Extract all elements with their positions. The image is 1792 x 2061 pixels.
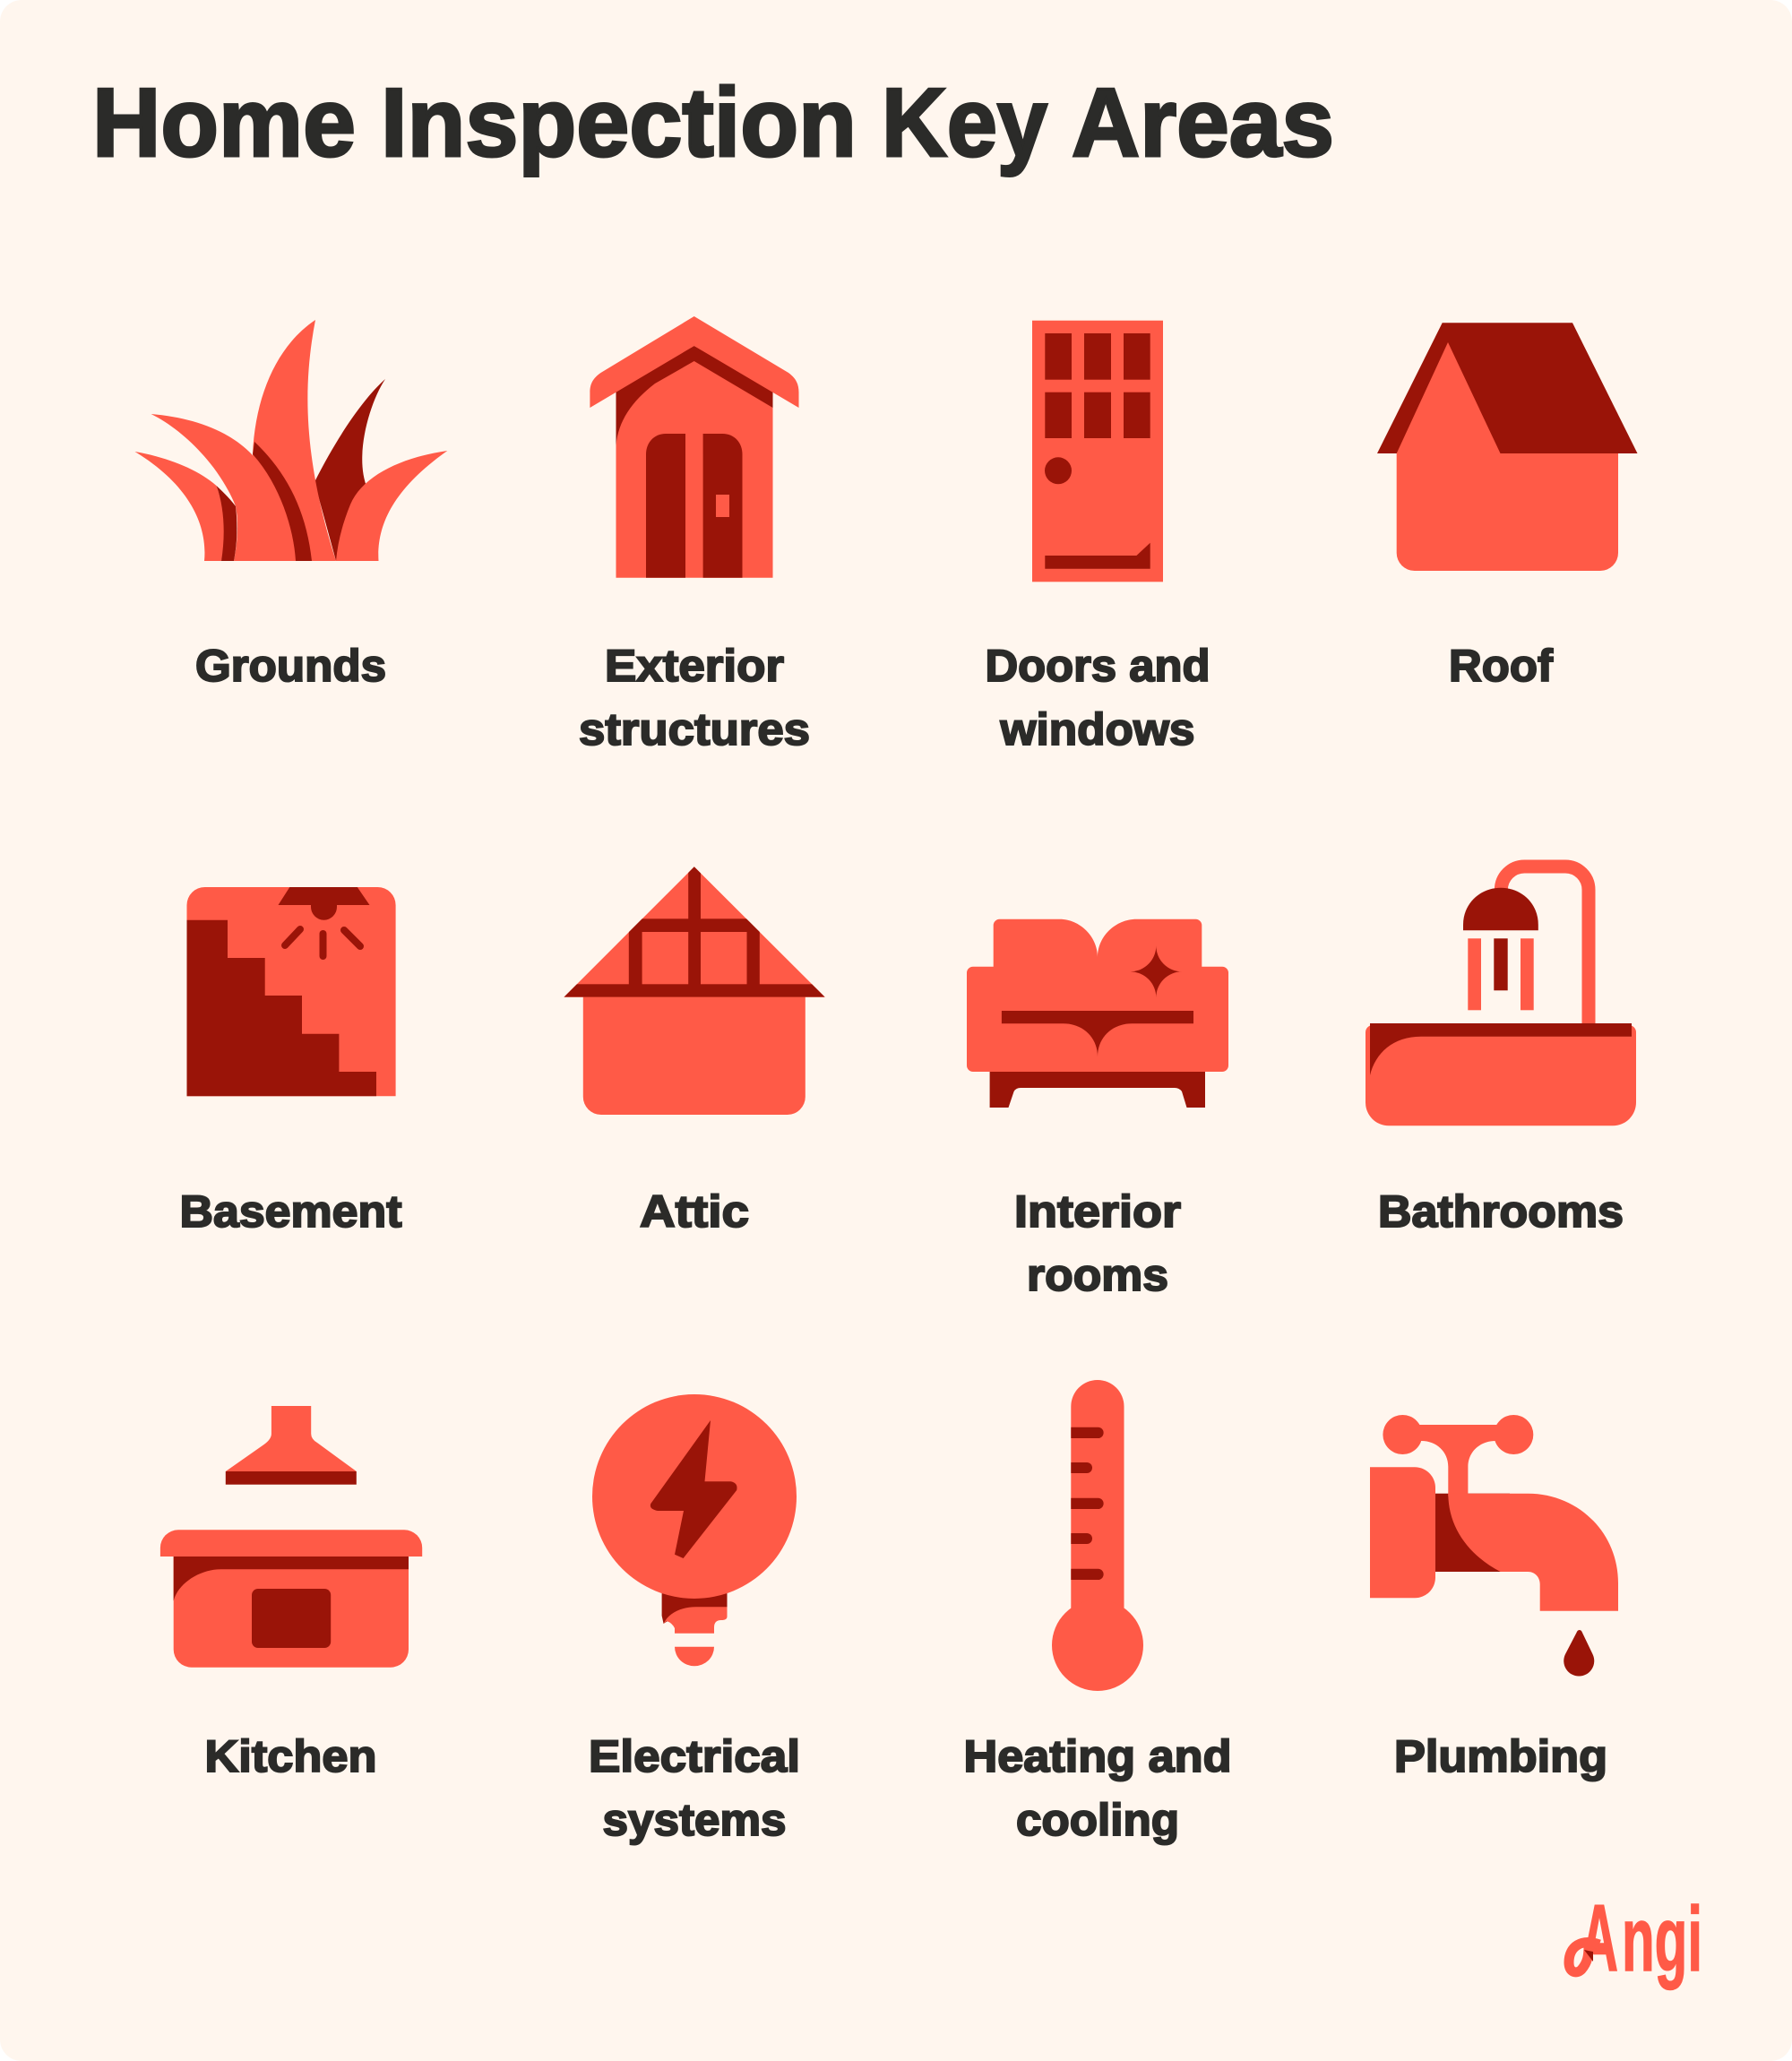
icon: hood and counter [160, 1406, 422, 1668]
icon: grass [134, 320, 447, 561]
icon: light bulb [592, 1394, 797, 1666]
panel: bathrooms [1366, 867, 1636, 1237]
icon: shower and bathtub [1366, 867, 1636, 1125]
panel: interior rooms [967, 919, 1228, 1300]
icon: door [1032, 321, 1163, 582]
label [579, 641, 810, 755]
label [964, 1731, 1231, 1845]
label: Bathrooms [1378, 1186, 1624, 1237]
title: Key [882, 68, 1047, 177]
logo: Angi: A [1581, 1885, 1618, 1991]
label: Basement [179, 1186, 402, 1237]
panel: kitchen [160, 1406, 422, 1781]
panel: grounds [134, 320, 447, 691]
panel: heating and cooling [964, 1380, 1231, 1845]
panel: doors and windows [986, 321, 1210, 755]
logo: Angi: ngi [1622, 1888, 1702, 1990]
label [986, 641, 1210, 755]
label: Plumbing [1394, 1731, 1607, 1781]
label: systems [602, 1795, 787, 1845]
label: Roof [1449, 641, 1553, 691]
logo: Angi [1564, 1903, 1699, 1991]
label: Grounds [195, 641, 386, 691]
icon: shed [590, 316, 799, 578]
label: Electrical [589, 1731, 800, 1781]
panel: attic [556, 860, 833, 1237]
panel: roof [1377, 323, 1638, 691]
title: Areas [1072, 68, 1334, 177]
label: Interior [1014, 1186, 1181, 1237]
title: Inspection [381, 68, 857, 177]
panel: plumbing [1370, 1415, 1618, 1781]
icon: house with roof [1377, 323, 1638, 571]
label: cooling [1016, 1795, 1179, 1845]
icon: sofa [967, 919, 1228, 1108]
label: structures [579, 704, 810, 755]
label: Exterior [605, 641, 784, 691]
title: Home [92, 68, 356, 177]
label: Kitchen [204, 1731, 376, 1781]
icon: attic house [556, 860, 833, 1115]
label: windows [999, 704, 1195, 755]
label [589, 1731, 800, 1845]
label [1014, 1186, 1181, 1300]
label: rooms [1027, 1250, 1168, 1300]
title [92, 68, 1334, 177]
icon: stairs and lamp [186, 887, 396, 1096]
label: Attic [640, 1186, 749, 1237]
icon: thermometer [1052, 1380, 1143, 1691]
label: Heating and [964, 1731, 1231, 1781]
label: Doors and [986, 641, 1210, 691]
icon: faucet [1370, 1415, 1618, 1677]
panel: basement [179, 887, 402, 1237]
panel: exterior structures [579, 316, 810, 755]
panel: electrical systems [589, 1394, 800, 1845]
